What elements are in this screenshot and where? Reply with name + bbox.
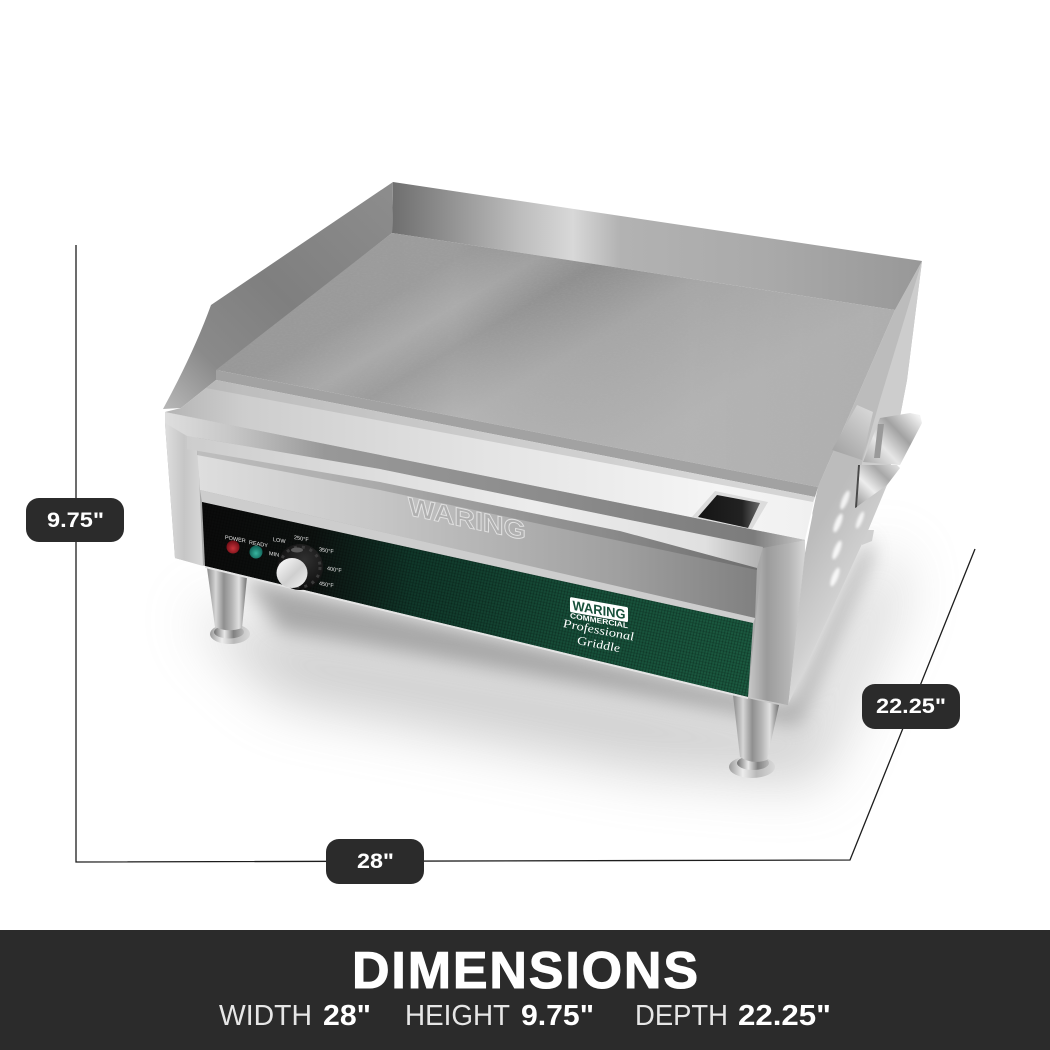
upper front channel [165,412,805,548]
footer band [0,930,1050,1050]
footer specification line: WIDTH [219,1000,312,1032]
height dimension label [26,498,124,542]
side latch handle [832,405,922,508]
depth dimension label [862,684,960,729]
depth dimension label: 22.25" [876,695,946,718]
ready label and lamp [249,540,268,558]
left front column [165,412,203,566]
footer title: DIMENSIONS [352,942,698,1000]
power label and lamp [225,535,246,554]
temperature scale labels [269,535,342,590]
footer specification line: DEPTH [635,1000,728,1032]
temperature scale labels: 350°F [319,547,334,556]
green logo badge: Professional [562,616,635,644]
front grease ledge [165,380,815,540]
width dimension label: 28" [357,850,394,873]
footer specification line [219,1000,831,1032]
green logo badge: COMMERCIAL [570,611,628,630]
temperature scale labels: 450°F [319,581,334,590]
temperature scale labels: 250°F [294,535,309,544]
griddle front body [165,412,805,705]
cooking plate [216,233,895,497]
right front column [748,540,805,705]
front right leg [729,695,779,778]
power label and lamp: POWER [225,535,246,545]
temperature scale labels: 400°F [327,566,342,575]
dimension lines [76,245,975,862]
griddle back wall [392,182,922,310]
grease slot [692,491,768,529]
griddle illustration [163,182,922,778]
front handle bar [187,436,763,568]
green logo badge: WARING [572,598,625,622]
fascia panel [197,448,757,618]
height dimension label: 9.75" [47,509,104,532]
footer specification line: 9.75" [521,1000,594,1032]
front left leg [207,568,250,644]
green logo badge [562,597,635,655]
footer specification line: 28" [323,1000,371,1032]
temperature scale labels: LOW [273,537,286,545]
griddle right side panel [788,261,922,705]
fascia trim strip [200,490,755,624]
green logo badge: Griddle [577,633,621,655]
embossed WARING logo: WARING [408,491,526,546]
back right leg [858,530,874,545]
footer specification line: HEIGHT [405,1000,510,1032]
floor shadow [190,535,900,780]
temperature scale labels: MIN [269,551,279,559]
control panel strip [202,502,753,699]
ready label and lamp: READY [249,540,268,549]
griddle left splash wall [163,182,393,409]
control knob [276,544,323,590]
width dimension label [326,839,424,884]
footer specification line: 22.25" [738,1000,831,1032]
